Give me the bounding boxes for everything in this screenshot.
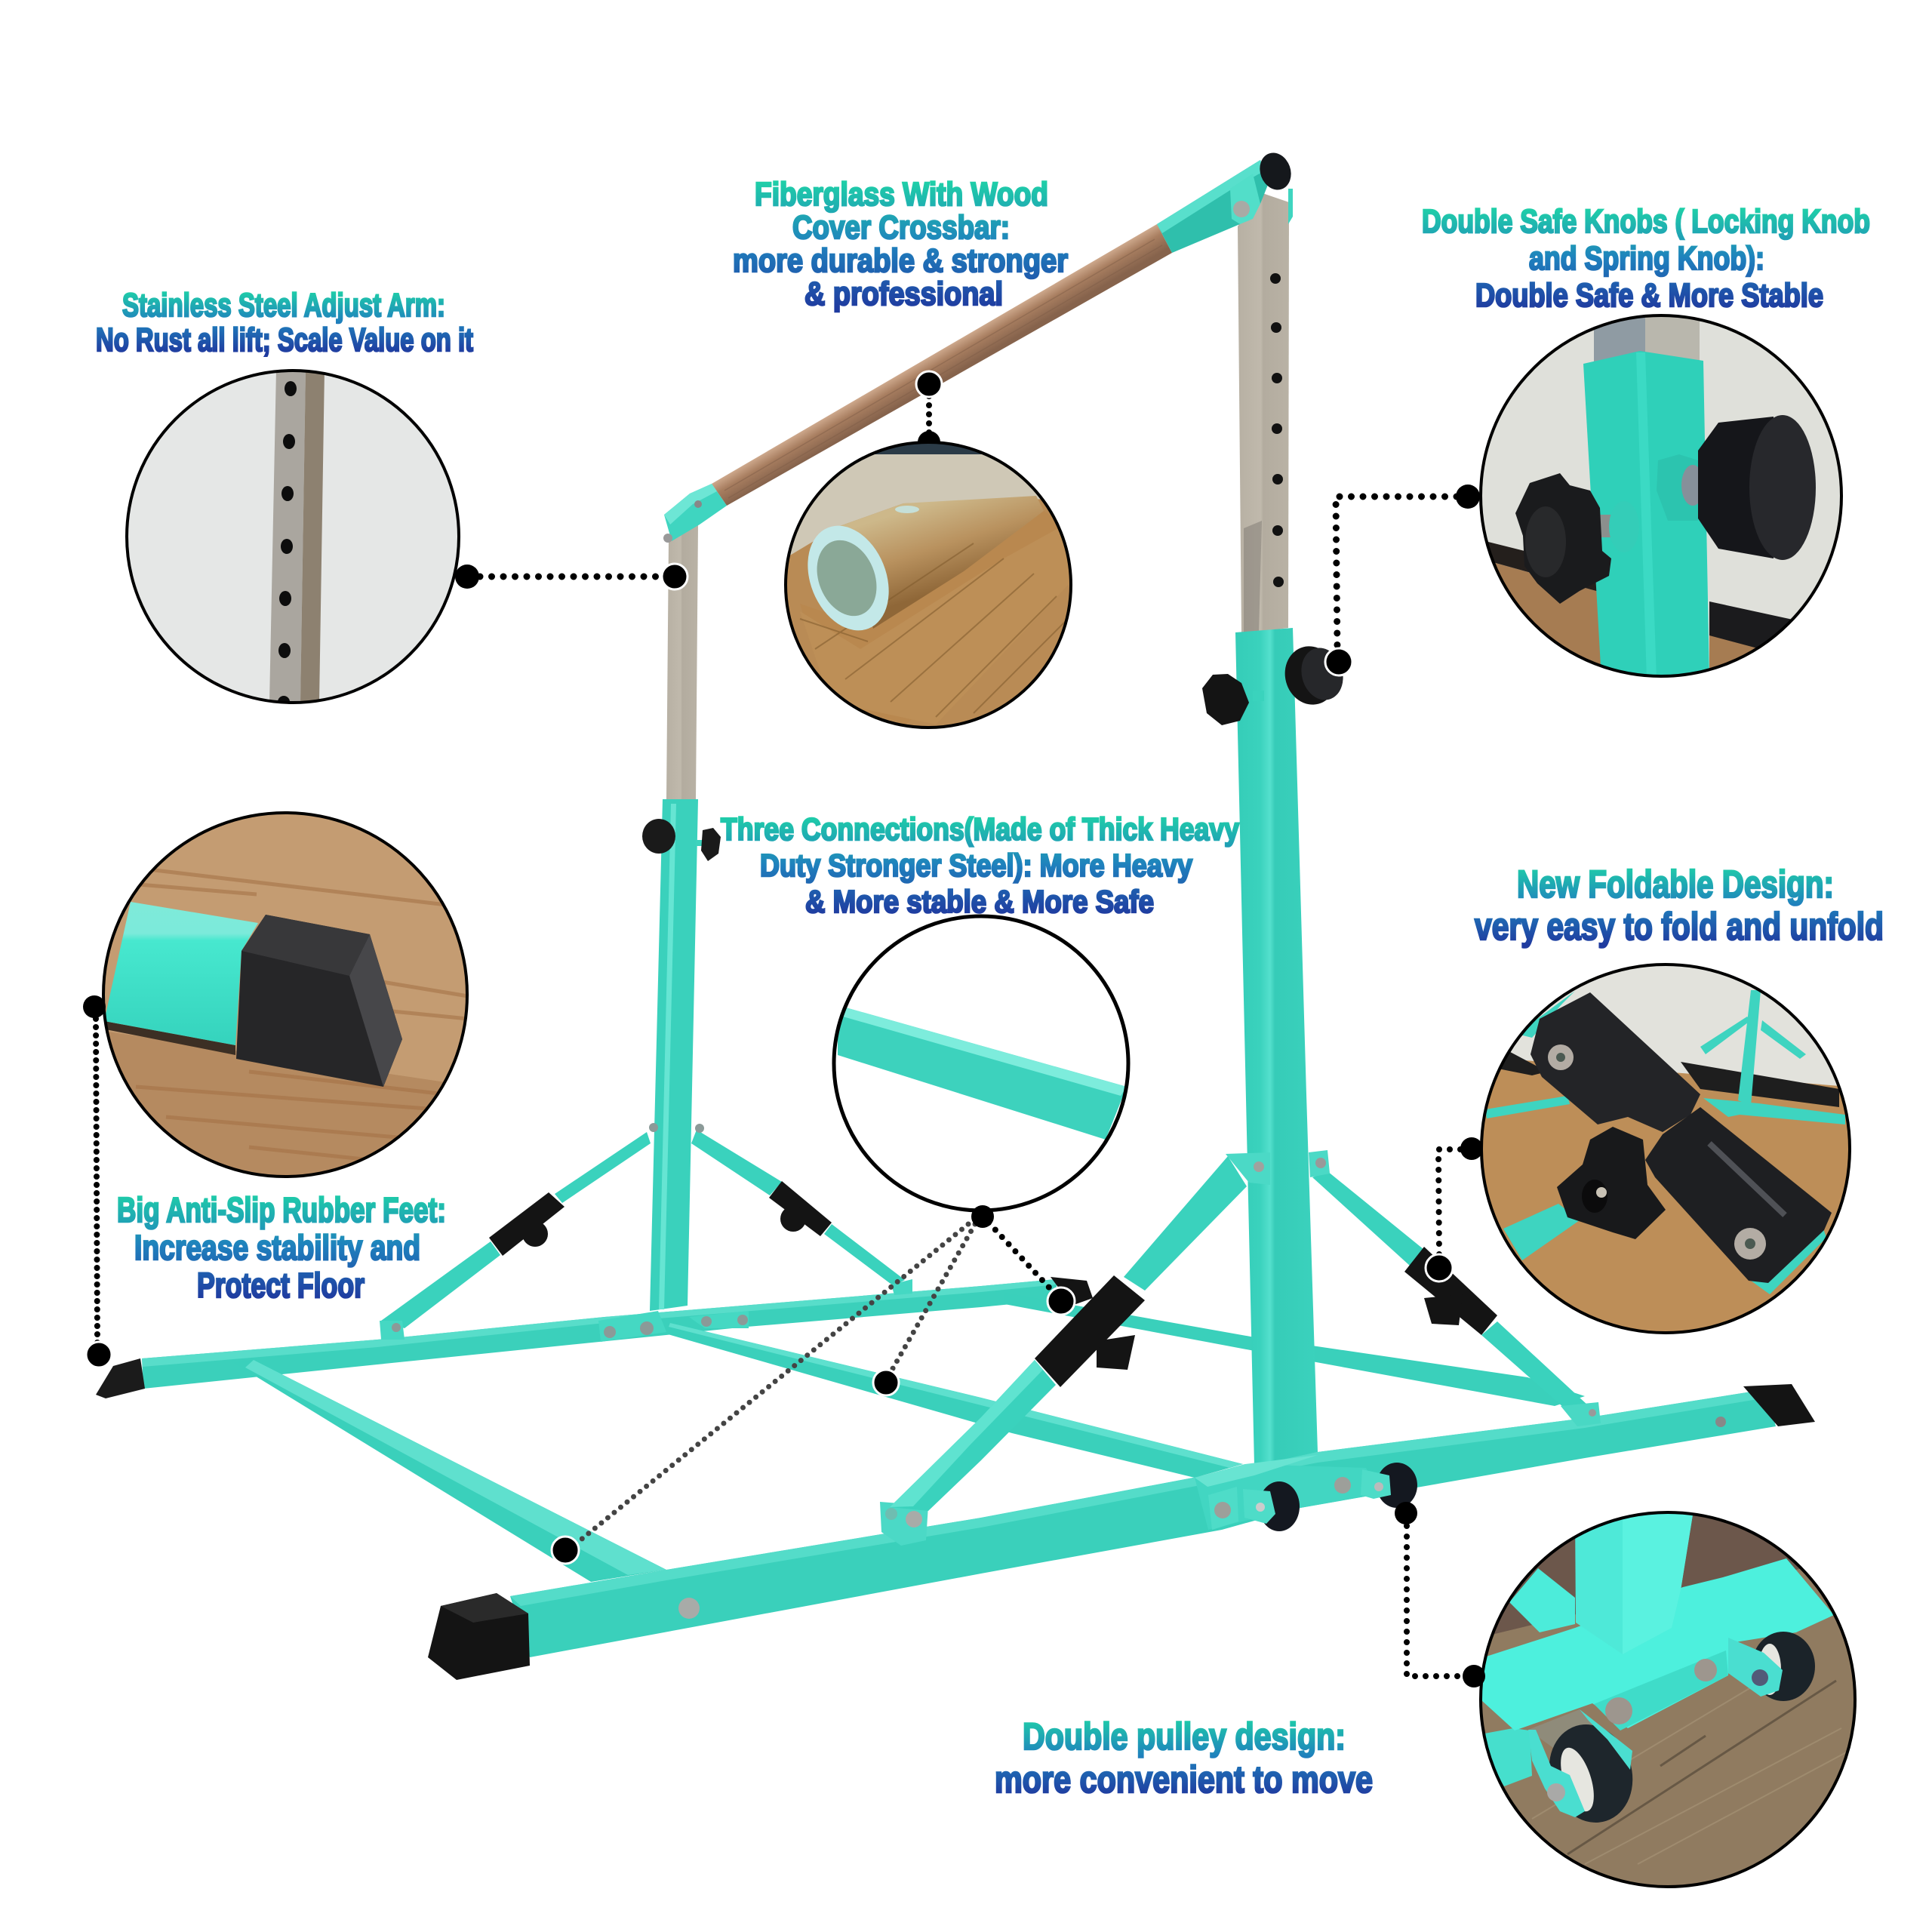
text: fiberglass crossbar: Fiberglass With Wood [755,176,1048,213]
text: stainless steel arm [96,287,473,358]
right pole right brace [1309,1150,1601,1426]
left pole left brace [380,1123,658,1340]
left pole right brace [691,1124,912,1295]
right foot [1743,1384,1815,1426]
back base bar [142,1279,1057,1389]
text: fiberglass crossbar: Cover Crossbar: [792,209,1010,246]
leader: three connections [552,1205,1075,1564]
text: fiberglass crossbar [733,176,1068,312]
text: fiberglass crossbar: & professional [804,275,1003,312]
text: three connections [721,811,1240,919]
text: double safe knobs [1422,203,1870,314]
callout: fiberglass crossbar [785,441,1072,732]
text: rubber feet: Big Anti-Slip Rubber Feet: [117,1190,446,1229]
text: double safe knobs: Double Safe & More Stable [1475,277,1823,314]
left elbow [663,484,727,543]
top right elbow [1157,149,1296,253]
leader: knobs [1325,485,1480,675]
gym bar product [96,149,1815,1680]
far foot [1051,1277,1093,1306]
callout: stainless steel adjust arm [121,366,468,708]
photo: cut tube [785,441,1072,732]
left side bar [234,1360,666,1582]
photo: steel arm [121,366,468,708]
bracket: front brace foot [880,1502,928,1546]
back left foot [96,1358,145,1398]
leader: double pulley [1395,1502,1485,1687]
pulley plate [1195,1455,1377,1530]
text: three connections: Three Connections(Made of Thick Heavy [721,811,1240,847]
leader: stainless steel arm [455,564,688,589]
center bar [668,1323,1243,1478]
text: foldable design: New Foldable Design: [1517,863,1834,906]
callout: rubber feet [98,808,475,1181]
right pole knobs [1202,641,1349,725]
callout: double pulley [1479,1509,1860,1890]
photo: pulleys [1479,1509,1860,1890]
text: stainless steel arm: No Rust all lift; Scale Value on it [96,321,473,358]
front pole [1235,628,1318,1466]
text: double pulley: more convenient to move [995,1758,1373,1801]
short left pole [650,525,698,1311]
left pole knobs [642,819,721,861]
photo: connection tube [838,1008,1124,1140]
front foot [428,1593,530,1680]
text: foldable design [1475,863,1884,948]
text: three connections: Duty Stronger Steel): More Heavy [760,848,1193,883]
photo: rubber foot [98,808,475,1181]
leader: rubber feet [83,995,112,1367]
right pole left brace [890,1152,1270,1511]
text: rubber feet: Protect Floor [197,1266,365,1305]
right rear bar [1004,1293,1585,1406]
text: three connections: & More stable & More Safe [805,884,1154,919]
left pole foot plates [598,1311,749,1342]
photo: knobs [1479,313,1845,679]
crossbar [712,224,1172,506]
text: double safe knobs: and Spring Knob): [1529,240,1764,277]
text: rubber feet [117,1190,446,1305]
leader: crossbar [916,371,942,442]
text: rubber feet: Increase stability and [134,1228,420,1267]
leader: foldable design [1426,1137,1483,1281]
front base bar [510,1389,1776,1657]
callout: foldable design [1479,962,1853,1336]
text: double pulley [995,1715,1373,1801]
callout: three connections [830,913,1132,1215]
text: fiberglass crossbar: more durable & stronger [733,242,1068,279]
callout: double safe knobs [1479,313,1845,679]
text: stainless steel arm: Stainless Steel Adjust Arm: [122,287,445,324]
right steel arm [1238,192,1289,634]
wheels [1243,1463,1417,1531]
text: double pulley: Double pulley design: [1023,1715,1346,1758]
photo: folding joint [1479,962,1853,1336]
